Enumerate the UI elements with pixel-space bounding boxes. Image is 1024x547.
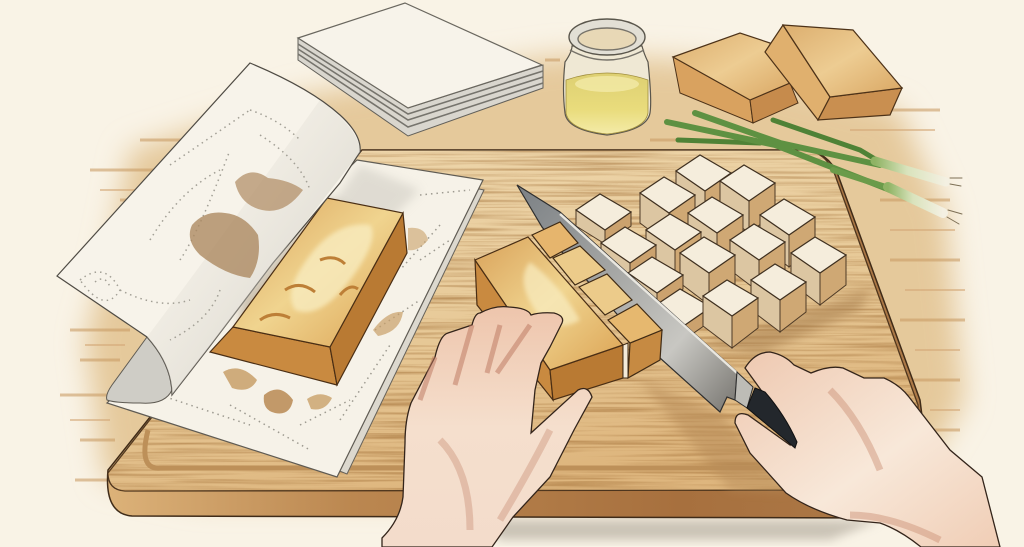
shadow under board bbox=[480, 520, 880, 540]
glass jar of oil bbox=[564, 19, 651, 135]
wooden table bbox=[60, 55, 965, 500]
chef's knife blade bbox=[517, 185, 753, 412]
stack of napkins bbox=[298, 3, 543, 136]
tempeh block being sliced bbox=[475, 222, 662, 400]
fried tempeh block on towel bbox=[210, 198, 407, 385]
tempeh slabs, back right bbox=[673, 25, 902, 123]
right hand with knife handle bbox=[735, 352, 1000, 547]
paper towel, bottom sheet bbox=[107, 160, 484, 477]
curled paper towel with oil stains bbox=[57, 63, 360, 403]
green onions bbox=[667, 113, 962, 224]
left hand bbox=[382, 307, 592, 547]
tofu cubes bbox=[576, 155, 846, 348]
cutting board bbox=[108, 150, 925, 518]
